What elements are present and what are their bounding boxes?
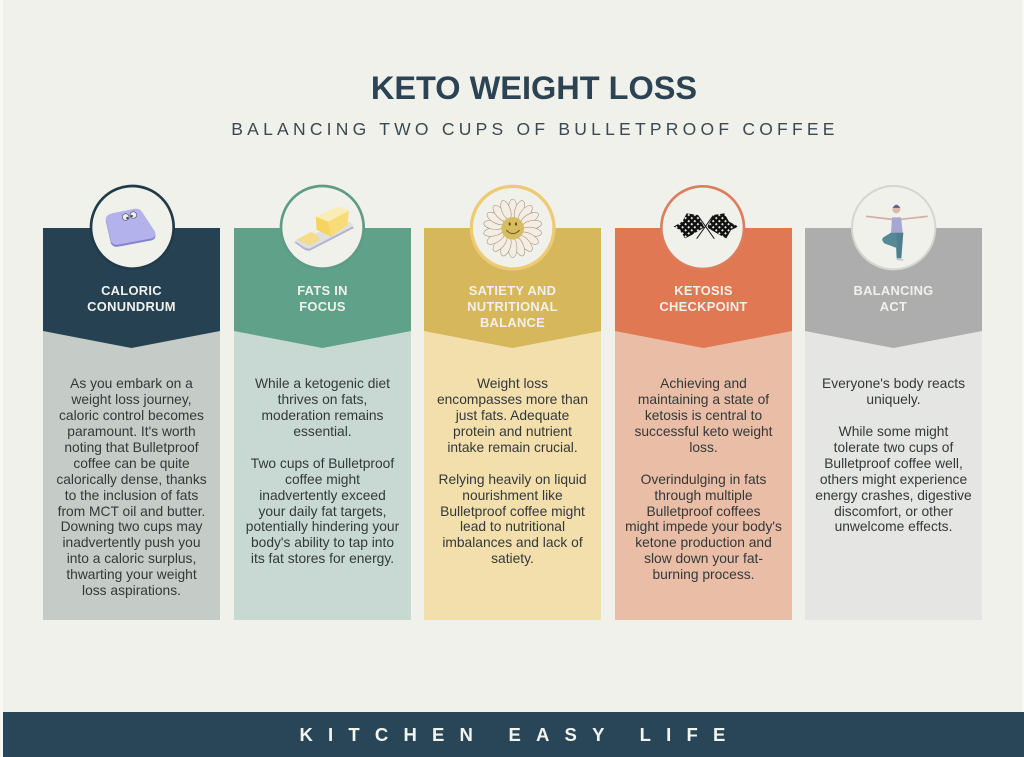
text: caloric: paramount. It's worth <box>67 424 196 439</box>
panel header: satiety <box>424 228 601 348</box>
panel body: ketosis <box>615 320 792 620</box>
panel heading: balancing <box>853 282 934 314</box>
text: satiety: imbalances and lack of <box>442 535 583 550</box>
text: caloric: noting that Bulletproof <box>64 440 199 455</box>
text: fats: essential. <box>293 424 352 439</box>
panel heading: balancing: ACT <box>880 298 907 314</box>
panel: satiety <box>424 184 601 620</box>
text: caloric <box>56 376 207 598</box>
icon: butter <box>280 184 365 268</box>
icon: smiling daisy <box>470 184 556 270</box>
right page edge <box>1022 0 1024 712</box>
text: caloric: caloric control becomes <box>59 408 204 423</box>
text: satiety <box>437 376 588 566</box>
text: satiety: nourishment like <box>462 488 563 503</box>
text: caloric: to the inclusion of fats <box>65 488 198 503</box>
text: caloric: loss aspirations. <box>82 583 181 598</box>
text: caloric: inadvertently push you <box>62 535 201 550</box>
text: ketosis: ketosis is central to <box>645 408 762 423</box>
panel header: caloric <box>43 228 220 348</box>
text: caloric: thwarting your weight <box>66 567 197 582</box>
text: caloric: calorically dense, thanks <box>56 472 207 487</box>
text: balancing: energy crashes, digestive <box>815 488 972 503</box>
icon: bathroom scale <box>90 184 175 270</box>
panel heading: fats: FOCUS <box>299 298 346 314</box>
text: satiety: satiety. <box>491 551 534 566</box>
text: satiety: lead to nutritional <box>460 519 565 534</box>
panel heading: satiety: NUTRITIONAL <box>467 298 558 314</box>
panel heading: caloric <box>87 282 176 314</box>
text: fats <box>246 376 399 566</box>
panel heading: caloric: CONUNDRUM <box>87 298 176 314</box>
text: fats: body's ability to tap into <box>251 535 394 550</box>
icon: yoga tree pose <box>851 185 936 270</box>
text: satiety: Relying heavily on liquid <box>438 472 587 487</box>
text: fats: While a ketogenic diet <box>255 376 390 391</box>
text: ketosis: Overindulging in fats <box>641 472 766 487</box>
title: KETO WEIGHT LOSS <box>371 70 697 106</box>
subtitle: BALANCING TWO CUPS OF BULLETPROOF COFFEE <box>231 119 839 139</box>
panel body: satiety <box>424 320 601 620</box>
text: ketosis: burning process. <box>652 567 754 582</box>
text: balancing: unwelcome effects. <box>835 519 952 534</box>
panel heading: fats: FATS IN <box>297 282 348 298</box>
text: caloric: coffee can be quite <box>73 456 190 471</box>
text: balancing: Bulletproof coffee well, <box>824 456 963 471</box>
text: fats: your daily fat targets, <box>258 504 387 518</box>
panel header: ketosis <box>615 228 792 348</box>
panel header: fats <box>234 228 411 348</box>
text: ketosis: maintaining a state of <box>638 392 769 407</box>
footer text: KITCHEN EASY LIFE <box>299 724 741 745</box>
panel heading: ketosis <box>659 282 748 314</box>
text: balancing: tolerate two cups of <box>834 440 953 455</box>
text: caloric: from MCT oil and butter. <box>58 504 205 518</box>
text: fats: potentially hindering your <box>246 519 399 534</box>
panel body: balancing <box>805 320 982 620</box>
panel header: balancing <box>805 228 982 348</box>
text: satiety: intake remain crucial. <box>447 440 578 455</box>
panel: caloric conundrum <box>43 184 220 620</box>
text: balancing: uniquely. <box>866 392 921 407</box>
icon: checkered flags <box>660 185 746 270</box>
text: satiety: Weight loss <box>477 376 548 391</box>
panel heading: ketosis: KETOSIS <box>674 282 733 298</box>
text: ketosis: ketone production and <box>635 535 772 550</box>
text: ketosis: slow down your fat- <box>644 551 763 566</box>
text: fats: thrives on fats, <box>278 392 367 407</box>
text: ketosis <box>625 376 782 582</box>
text: ketosis: through multiple <box>654 488 753 503</box>
text: fats: inadvertently exceed <box>259 488 386 503</box>
text: satiety: Bulletproof coffee might <box>440 504 585 518</box>
panel heading: satiety: BALANCE <box>480 314 545 330</box>
text: fats: coffee might <box>285 472 360 487</box>
left page edge <box>0 0 3 757</box>
text: balancing <box>815 376 972 534</box>
text: caloric: into a caloric surplus, <box>67 551 196 566</box>
text: caloric: As you embark on a <box>70 376 193 391</box>
panel body: caloric <box>43 320 220 620</box>
panel heading: caloric: CALORIC <box>101 282 162 298</box>
text: ketosis: successful keto weight <box>634 424 773 439</box>
text: ketosis: loss. <box>689 440 718 455</box>
text: balancing: Everyone's body reacts <box>822 376 965 391</box>
text: fats: its fat stores for energy. <box>251 551 394 566</box>
text: fats: moderation remains <box>262 408 383 423</box>
panel heading: satiety <box>467 282 558 330</box>
panel: balancing act <box>805 185 982 620</box>
text: fats: Two cups of Bulletproof <box>251 456 394 471</box>
text: satiety: protein and nutrient <box>453 424 572 439</box>
text: satiety: encompasses more than <box>437 392 588 407</box>
text: ketosis: might impede your body's <box>625 519 782 534</box>
footer bar <box>3 712 1024 757</box>
text: caloric: Downing two cups may <box>61 519 202 534</box>
panel: fats in focus <box>234 184 411 620</box>
panel body: fats <box>234 320 411 620</box>
panel heading: fats <box>297 282 348 314</box>
text: balancing: others might experience <box>820 472 967 487</box>
text: ketosis: Achieving and <box>660 376 747 391</box>
panel heading: satiety: SATIETY AND <box>469 282 556 298</box>
text: balancing: While some might <box>839 424 948 439</box>
text: balancing: discomfort, or other <box>834 504 953 518</box>
panel heading: balancing: BALANCING <box>853 282 934 298</box>
text: ketosis: Bulletproof coffees <box>646 504 761 518</box>
panel: ketosis <box>615 185 792 620</box>
text: satiety: just fats. Adequate <box>456 408 569 423</box>
panel heading: ketosis: CHECKPOINT <box>659 298 748 314</box>
text: caloric: weight loss journey, <box>71 392 192 407</box>
